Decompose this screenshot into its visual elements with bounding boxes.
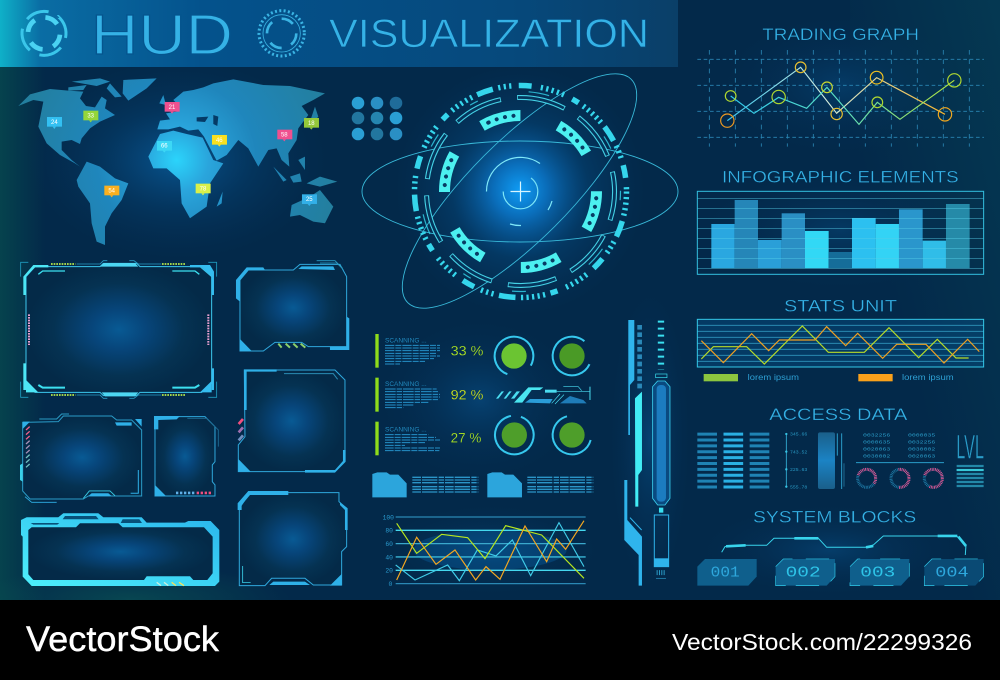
title: HUD: HUD — [91, 3, 233, 67]
map pins: 24 — [51, 120, 58, 126]
thick blocks — [417, 88, 624, 295]
right panel lower — [697, 297, 984, 586]
block 004: 004 — [935, 566, 969, 582]
block 003 — [850, 559, 909, 586]
scanning row 2 — [375, 378, 483, 412]
world map — [18, 78, 337, 245]
access data widgets: 0030002 — [908, 447, 935, 453]
footer logo: VectorStock — [26, 620, 220, 659]
block 003: 003 — [860, 566, 895, 582]
scanning row 1: SCANNING ... — [385, 339, 427, 345]
dot matrix — [352, 97, 402, 140]
map pins: 46 — [216, 138, 223, 144]
icon: dotted ring — [259, 11, 304, 56]
chart: trading graph — [697, 50, 984, 147]
gauges — [489, 330, 598, 460]
scanning row 2: 92 % — [451, 386, 483, 402]
legend: lorem ipsum — [748, 372, 799, 382]
access data widgets: 0030002 — [863, 454, 890, 460]
access data widgets: 0032256 — [863, 433, 890, 439]
chart: bar chart — [697, 191, 984, 274]
access data widgets: 0000635 — [863, 440, 890, 446]
frame: upper right — [236, 261, 349, 351]
legend — [704, 372, 954, 382]
right panel upper — [697, 25, 984, 274]
heading: infographic elements: INFOGRAPHIC ELEMENTS — [722, 168, 959, 187]
title: VISUALIZATION: VISUALIZATION — [329, 12, 649, 56]
map pins: 18 — [308, 121, 315, 127]
scanning row 2: SCANNING ... — [385, 382, 427, 388]
block 004 — [924, 559, 984, 586]
map pins: 21 — [169, 105, 176, 111]
scanning row 3: 27 % — [451, 430, 481, 446]
frame: middle right — [238, 369, 346, 473]
centre panel — [372, 320, 670, 588]
decorative tech glyph — [496, 387, 590, 404]
heading: trading graph: TRADING GRAPH — [762, 25, 919, 44]
connector line — [722, 536, 966, 555]
frame: mid left — [20, 414, 142, 502]
map pins — [47, 102, 319, 206]
access data widgets: 555.78 — [790, 484, 808, 490]
line chart — [383, 514, 586, 588]
scanning row 3: SCANNING ... — [385, 428, 427, 434]
heading: access data: ACCESS DATA — [769, 405, 908, 424]
frame: large console — [21, 261, 217, 398]
folder icons — [372, 472, 593, 497]
scanning row 3 — [375, 422, 481, 455]
heading: stats unit: STATS UNIT — [784, 297, 897, 316]
header band — [0, 0, 678, 67]
line chart: 60 — [385, 541, 393, 548]
map pins: 25 — [306, 197, 313, 203]
outer dashed rim — [414, 86, 626, 298]
access data widgets: 0032256 — [908, 440, 935, 446]
outline arcs — [388, 59, 653, 324]
access data widgets: 225.63 — [790, 467, 808, 473]
frames left column — [20, 261, 349, 586]
radar ring — [362, 44, 678, 338]
map pins: 58 — [281, 132, 288, 138]
block 001: 001 — [711, 566, 740, 582]
map pins: 78 — [200, 186, 207, 192]
line chart: 0 — [389, 581, 393, 588]
map pins: 33 — [87, 113, 95, 119]
line chart: 20 — [385, 568, 393, 575]
frame: lower right — [238, 491, 348, 586]
frame: wide bright — [21, 513, 219, 586]
line chart: 40 — [385, 554, 393, 561]
legend: lorem ipsum — [902, 372, 954, 382]
map pins: 66 — [161, 144, 168, 150]
access data widgets: 743.52 — [790, 449, 808, 455]
block 001 — [697, 559, 757, 586]
footer bar — [0, 600, 1000, 680]
block 002 — [776, 559, 835, 586]
access data widgets: 345.66 — [790, 432, 808, 438]
access data widgets — [707, 428, 984, 491]
access data widgets: 0020063 — [863, 447, 890, 453]
footer url: VectorStock.com/22299326 — [672, 629, 972, 655]
heading: system blocks: SYSTEM BLOCKS — [753, 507, 916, 526]
icon: segmented ring left — [13, 2, 75, 64]
line chart: 100 — [383, 514, 394, 521]
scanning row 1: 33 % — [451, 343, 483, 359]
map pins: 54 — [108, 188, 116, 194]
chart: stats unit — [697, 319, 984, 367]
access data widgets: 0000035 — [908, 433, 935, 439]
vertical tech tower — [624, 320, 670, 586]
frame: small mid — [154, 416, 218, 496]
block 002: 002 — [786, 566, 821, 582]
access data widgets: 0020063 — [908, 454, 935, 460]
orbit ellipses — [362, 44, 678, 338]
core arcs — [486, 157, 552, 226]
line chart: 80 — [385, 528, 393, 535]
scanning row 1 — [375, 334, 483, 368]
